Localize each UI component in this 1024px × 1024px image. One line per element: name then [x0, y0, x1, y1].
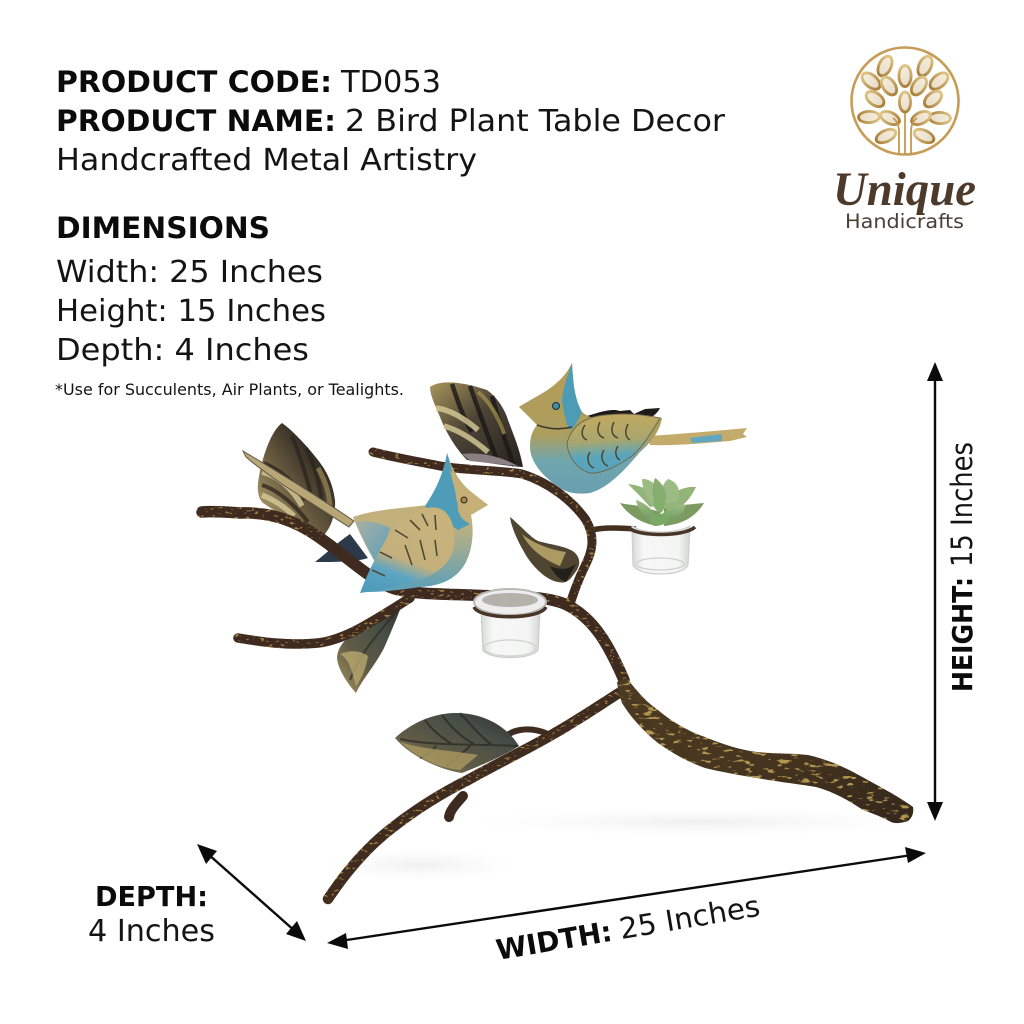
branch: front left leg — [328, 691, 622, 899]
left bird face — [450, 470, 488, 515]
branch: lower-left arm — [238, 598, 410, 644]
product: bird plant table decor — [202, 363, 930, 899]
brand logo — [833, 48, 976, 233]
right bird black feathers — [587, 408, 660, 424]
height arrow — [927, 362, 943, 821]
dimensions list — [56, 255, 326, 368]
product code line: TD053 — [340, 65, 441, 100]
height label — [945, 442, 979, 692]
width arrow — [327, 847, 926, 949]
product code line: PRODUCT CODE: — [56, 65, 332, 99]
dimensions list: Depth: 4 Inches — [56, 333, 309, 368]
branch: main trunk and right foot — [617, 677, 913, 823]
redraw of branch over dark feathers — [320, 538, 392, 588]
branch: rear foot strut — [449, 796, 463, 817]
width label: WIDTH: — [494, 915, 615, 967]
bird: right bird — [519, 363, 747, 494]
succulent plant — [620, 478, 704, 526]
product code line — [56, 65, 441, 100]
left bird body — [353, 453, 488, 592]
width label: 25 Inches — [617, 889, 762, 946]
leaf: middle small — [510, 517, 579, 583]
height label: HEIGHT: — [946, 577, 979, 692]
leaf: lower-left — [337, 602, 403, 693]
leaf: top-centre — [430, 382, 523, 467]
right bird eye — [552, 402, 560, 410]
branch: arc behind bottom leaf — [500, 729, 548, 745]
dimensions block — [56, 211, 326, 368]
depth label: DEPTH: — [95, 880, 208, 913]
logo emblem: tree in circle — [852, 48, 958, 154]
right bird wing — [567, 414, 660, 473]
bird: left bird — [243, 451, 488, 593]
product name line: 2 Bird Plant Table Decor — [345, 104, 726, 139]
left bird blue flank — [356, 521, 390, 562]
left bird blue crest — [425, 453, 470, 530]
tealight glass: right — [628, 526, 695, 574]
branch: main curve to left tip — [202, 512, 624, 680]
width label — [493, 889, 762, 967]
right bird blue crest — [562, 363, 582, 430]
tagline: Handcrafted Metal Artistry — [56, 143, 477, 178]
left bird eye — [461, 497, 467, 503]
left bird wing — [360, 507, 454, 593]
dimensions heading: DIMENSIONS — [56, 211, 270, 245]
right bird body — [519, 363, 662, 494]
height label: 15 Inches — [945, 442, 979, 567]
dimensions list: Height: 15 Inches — [56, 294, 326, 329]
right bird collar line — [537, 425, 572, 429]
depth dimension annotation — [88, 844, 306, 949]
right bird tail — [648, 428, 747, 445]
dimensions list: Width: 25 Inches — [56, 255, 323, 290]
bird: dark tail feathers of left bird — [315, 534, 368, 562]
branch: arm to right glass — [592, 528, 636, 530]
width dimension annotation — [327, 847, 926, 967]
logo wordmark: Unique: Unique — [833, 163, 976, 216]
depth arrow — [197, 844, 306, 941]
floor shadow — [320, 808, 930, 881]
logo wordmark: Handicrafts: Handicrafts — [845, 210, 964, 233]
product title block — [56, 65, 726, 178]
depth label: 4 Inches — [88, 914, 215, 949]
depth label — [88, 880, 215, 949]
left bird long tail — [243, 451, 354, 527]
tealight glass: centre — [474, 589, 546, 658]
product name line: PRODUCT NAME: — [56, 104, 336, 138]
usage note: *Use for Succulents, Air Plants, or Tealights. — [55, 380, 404, 399]
product name line — [56, 104, 726, 139]
leaf: top-left behind bird — [258, 423, 335, 537]
leaf: bottom — [395, 713, 519, 773]
height dimension annotation — [927, 362, 979, 821]
branch: upper arm — [373, 452, 592, 604]
